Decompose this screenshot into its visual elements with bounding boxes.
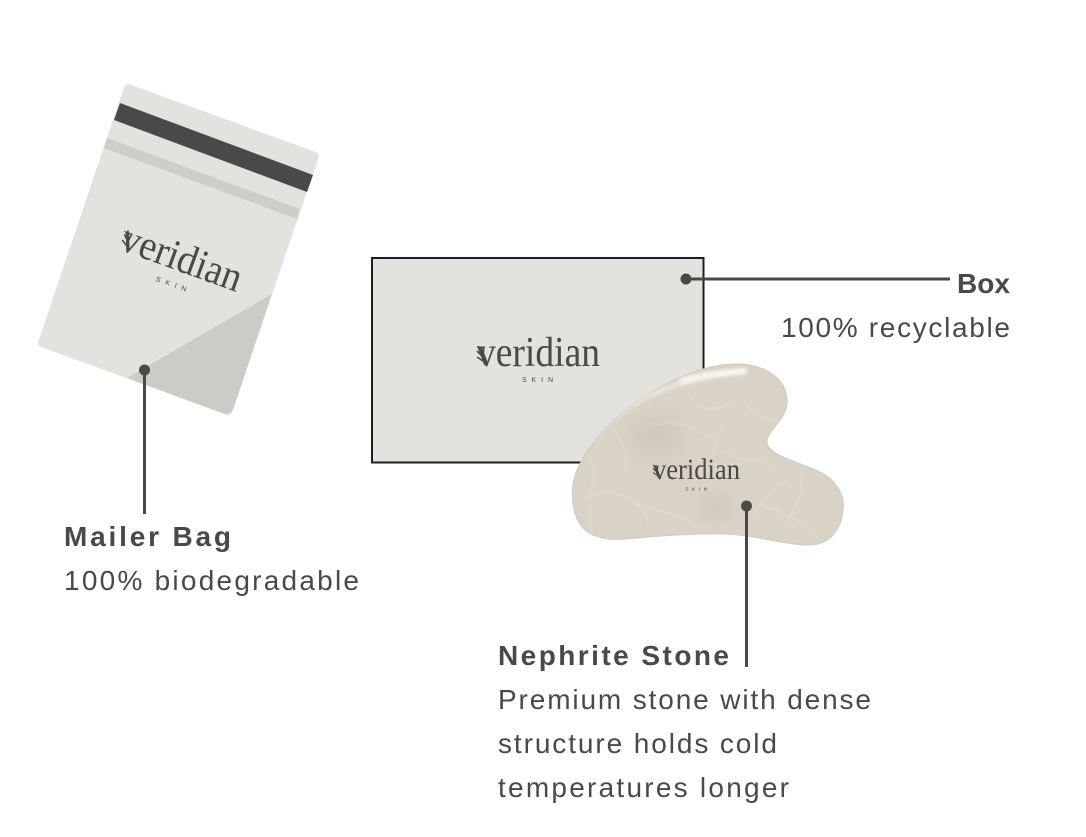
- label: mailer bag: 100% biodegradable: [64, 565, 359, 596]
- box logo: SKIN: [522, 377, 553, 384]
- stone logo: SKIN: [685, 486, 708, 492]
- stone veins: [580, 395, 815, 535]
- label: nephrite stone: Nephrite Stone: [498, 640, 729, 671]
- label: mailer bag: Mailer Bag: [64, 521, 231, 552]
- leader: mailer bag: [139, 364, 150, 514]
- stone logo: veridian: [653, 453, 740, 486]
- bag dark stripe: [114, 103, 313, 192]
- stone highlight: [596, 374, 734, 439]
- label: box: 100% recyclable: [781, 312, 1010, 343]
- panel: nephrite stone: [572, 364, 843, 545]
- bag corner fold: [127, 294, 272, 414]
- box logo: veridian: [477, 330, 600, 376]
- panel: mailer bag: [42, 88, 315, 414]
- label: nephrite stone: structure holds cold: [498, 728, 777, 759]
- panel: box: [372, 258, 704, 462]
- label: nephrite stone: temperatures longer: [498, 772, 789, 803]
- label: nephrite stone: [498, 640, 871, 803]
- label: nephrite stone: Premium stone with dense: [498, 684, 871, 715]
- leader: nephrite stone: [741, 500, 752, 667]
- leader: box: [680, 274, 950, 284]
- stone shading: [642, 426, 668, 444]
- label: mailer bag: [64, 521, 359, 596]
- label: box: Box: [957, 268, 1010, 299]
- stone body: [572, 364, 843, 545]
- bag logo: SKIN: [155, 276, 187, 294]
- bag light stripe: [104, 138, 300, 219]
- bag body: [42, 88, 315, 411]
- bag logo: veridian: [115, 215, 249, 301]
- label: box: [781, 268, 1010, 343]
